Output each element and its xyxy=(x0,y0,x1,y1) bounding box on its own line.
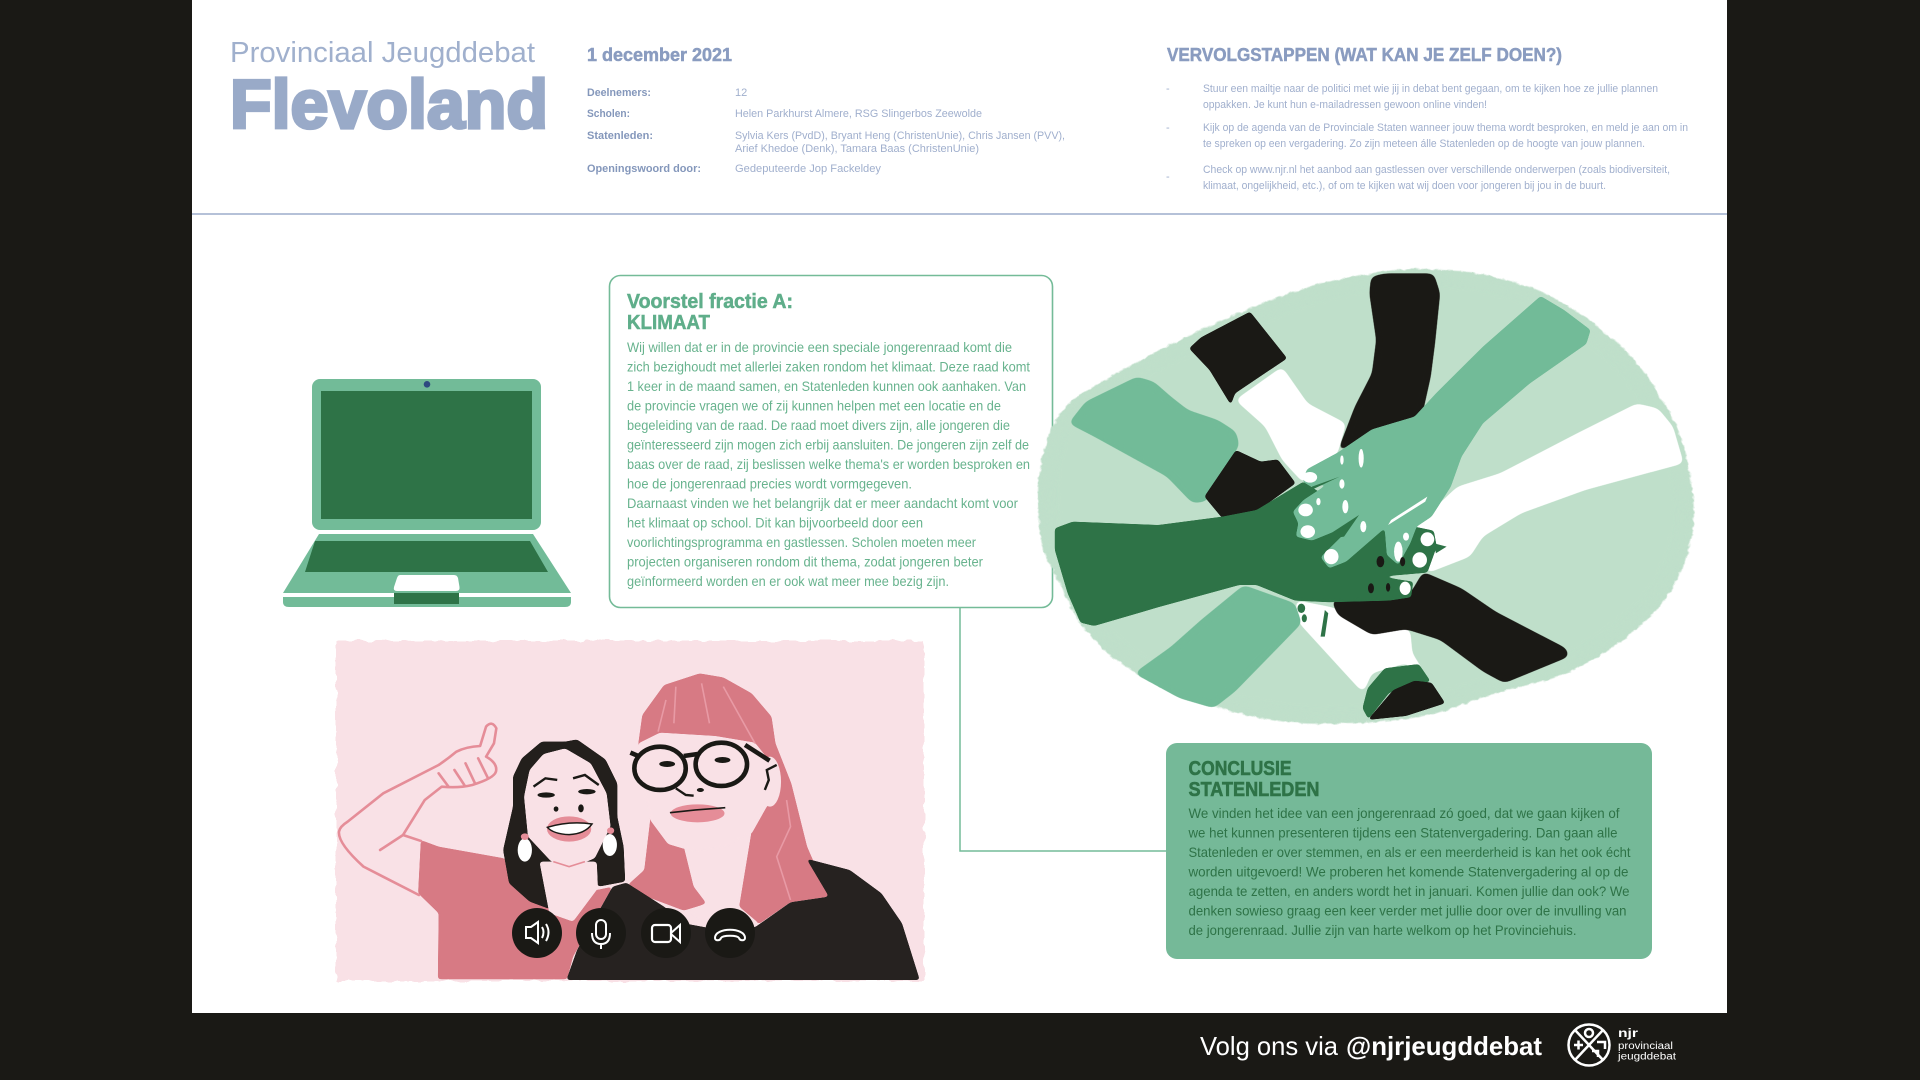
hand: mid green xyxy=(1293,296,1591,568)
date: 1 december 2021 xyxy=(587,45,732,65)
logo wordmark: jeugddebat xyxy=(1617,1052,1676,1062)
step 1: - xyxy=(1166,83,1170,95)
title block xyxy=(230,37,548,143)
step 2: te spreken op een vergadering. Zo zijn meteen álle Statenleden op de hoogte van jouw plannen. xyxy=(1203,138,1645,150)
logo: njr provinciaal jeugddebat xyxy=(1568,1024,1676,1066)
panel body text: worden uitgevoerd! We proberen het komende Statenvergadering al op de xyxy=(1188,864,1629,880)
laptop camera xyxy=(424,381,430,388)
schools: Scholen: xyxy=(587,108,630,120)
logo emblem xyxy=(1568,1024,1610,1066)
arm: black lower right xyxy=(1331,572,1569,683)
laptop touchpad xyxy=(394,575,460,591)
panel heading xyxy=(1188,758,1320,801)
person left: shirt xyxy=(418,840,613,979)
button: camera xyxy=(641,908,691,958)
people xyxy=(339,673,920,980)
panel body text: de jongerenraad. Jullie zijn van harte welkom op het Provinciehuis. xyxy=(1188,922,1576,938)
panel body text: Wij willen dat er in de provincie een speciale jongerenraad komt die xyxy=(627,339,1012,355)
person left: arm outline xyxy=(339,724,496,895)
cap: black xyxy=(1368,681,1445,720)
step 1 xyxy=(1166,83,1658,111)
person left: face xyxy=(524,748,611,867)
arm: black middle left xyxy=(1204,450,1296,518)
participants: 12 xyxy=(735,87,747,99)
finger folds xyxy=(1297,477,1447,637)
panel body text: geïnteresseerd zijn mogen zich erbij aansluiten. De jongeren zijn zelf de xyxy=(627,436,1029,452)
panel body text: agenda te zetten, en anders wordt het in januari. Komen jullie dan ook? We xyxy=(1188,883,1630,899)
panel body text xyxy=(1188,805,1631,938)
white sheet xyxy=(192,0,1727,1013)
panel heading: KLIMAAT xyxy=(627,312,710,334)
panel body text: het klimaat op school. Dit kan bijvoorbeeld door een xyxy=(627,514,923,530)
handle: @njrjeugddebat xyxy=(1346,1031,1542,1061)
step 3 xyxy=(1166,164,1670,192)
panel fill xyxy=(1166,743,1652,959)
connector line xyxy=(960,608,1166,851)
person right: shirt xyxy=(566,859,920,980)
background blob xyxy=(1038,268,1694,724)
person left: arm joint xyxy=(403,835,422,841)
panel heading: STATENLEDEN xyxy=(1188,779,1320,801)
opening speech: Openingswoord door: xyxy=(587,163,701,175)
laptop front lip xyxy=(283,597,571,607)
schools: Helen Parkhurst Almere, RSG Slingerbos Zeewolde xyxy=(735,108,982,120)
illustration: video call xyxy=(336,641,924,981)
person left: features xyxy=(534,775,599,867)
logo wordmark: provinciaal xyxy=(1618,1041,1673,1052)
follow text: Volg ons via xyxy=(1200,1031,1339,1061)
laptop display xyxy=(321,391,532,519)
panel body text: Statenleden er over stemmen, en als er een meerderheid is kan het ook écht xyxy=(1188,844,1631,860)
person right: features xyxy=(659,757,777,822)
laptop base xyxy=(283,534,571,593)
finger nails xyxy=(1298,449,1434,595)
step 2: - xyxy=(1166,122,1170,134)
step 1: Stuur een mailtje naar de politici met wie jij in debat bent gegaan, om te kijken hoe ze jullie plannen xyxy=(1203,83,1658,95)
panel body text: baas over de raad, zij beslissen welke thema's er worden besproken en xyxy=(627,456,1030,472)
panel body text: voorlichtingsprogramma en gastlessen. Scholen moeten meer xyxy=(627,534,976,550)
illustration: stacked hands xyxy=(1038,268,1694,724)
person right: glasses xyxy=(630,743,770,790)
panel body text: geïnformeerd worden en er ook wat meer mee bezig zijn. xyxy=(627,573,949,589)
call buttons xyxy=(512,908,755,958)
footer social handle xyxy=(1200,1031,1542,1061)
panel border xyxy=(610,276,1052,608)
opening speech: Gedeputeerde Jop Fackeldey xyxy=(735,163,881,175)
button: speaker xyxy=(512,908,562,958)
arm: mid green lower left xyxy=(1134,585,1302,708)
step 3: klimaat, ongelijkheid, etc.), of om te kijken wat wij doen voor jongeren bij jou in de buurt. xyxy=(1203,180,1606,192)
white gap: bottom xyxy=(1295,600,1432,693)
cuff: black upper left xyxy=(1189,312,1287,405)
panel body text: Daarnaast vinden we het belangrijk dat er meer aandacht komt voor xyxy=(627,495,1018,511)
person left: earrings xyxy=(518,827,617,862)
council members: Arief Khedoe (Denk), Tamara Baas (ChristenUnie) xyxy=(735,143,979,155)
knuckle marks xyxy=(1368,556,1405,593)
council members: Statenleden: xyxy=(587,130,653,142)
laptop keyboard xyxy=(305,541,548,572)
panel body text: zich bezighoudt met allerlei zaken rondom het klimaat. Deze raad komt xyxy=(627,358,1030,374)
laptop screen frame xyxy=(312,379,541,530)
participants xyxy=(587,87,747,99)
panel body text xyxy=(627,339,1030,589)
panel body text: hoe de jongerenraad precies wordt vormgegeven. xyxy=(627,476,912,492)
logo wordmark xyxy=(1617,1026,1676,1062)
event details xyxy=(587,45,1065,175)
white gap: upper left xyxy=(1235,367,1346,483)
panel: conclusion council members xyxy=(1166,743,1652,959)
panel body text: de provincie vragen we of zij kunnen helpen met een locatie en de xyxy=(627,398,1001,414)
step 2: Kijk op de agenda van de Provinciale Staten wanneer jouw thema wordt besproken, en meld je aan om in xyxy=(1203,122,1688,134)
person right: face xyxy=(638,733,781,852)
button: microphone xyxy=(576,908,626,958)
logo wordmark: njr xyxy=(1618,1026,1638,1040)
panel heading: CONCLUSIE xyxy=(1188,758,1292,780)
person right: hair xyxy=(628,673,829,924)
person left: fist fingers xyxy=(439,758,488,787)
person right: ear xyxy=(759,757,781,807)
panel body text: projecten organiseren rondom dit thema, zodat jongeren beter xyxy=(627,554,983,570)
panel body text: we het kunnen presenteren tijdens een Statenvergadering. Dan gaan alle xyxy=(1188,824,1618,840)
schools xyxy=(587,108,982,120)
person right: neck xyxy=(684,830,760,929)
call background xyxy=(336,641,924,981)
council members xyxy=(587,130,1065,155)
button: hang up xyxy=(705,908,755,958)
title: Provinciaal Jeugddebat: Provinciaal Jeugddebat xyxy=(230,37,535,69)
panel: proposal climate xyxy=(610,276,1052,608)
step 2 xyxy=(1166,122,1688,150)
person left: neck xyxy=(539,862,598,922)
laptop notch xyxy=(394,593,459,604)
step 3: - xyxy=(1166,171,1170,183)
icon: laptop xyxy=(283,379,571,607)
panel body text: begeleiding van de raad. De raad moet divers zijn, alle jongeren die xyxy=(627,417,1010,433)
next steps heading: VERVOLGSTAPPEN (WAT KAN JE ZELF DOEN?) xyxy=(1167,45,1562,65)
arm: mid green left xyxy=(1068,377,1239,503)
step 1: oppakken. Je kunt hun e-mailadressen gewoon online vinden! xyxy=(1203,99,1487,111)
title: Flevoland: Flevoland xyxy=(230,66,548,143)
panel heading: Voorstel fractie A: xyxy=(627,291,793,313)
person left: hair xyxy=(503,739,625,909)
participants: Deelnemers: xyxy=(587,87,651,99)
panel body text: denken sowieso graag een keer verder met jullie door over de invulling van xyxy=(1188,902,1626,918)
panel body text: 1 keer in de maand samen, en Statenleden kunnen ook aanhaken. Van xyxy=(627,378,1026,394)
panel body text: We vinden het idee van een jongerenraad zó goed, dat we gaan kijken of xyxy=(1188,805,1620,821)
hand: dark green xyxy=(1055,482,1437,626)
arm: black top xyxy=(1337,273,1440,453)
step 3: Check op www.njr.nl het aanbod aan gastlessen over verschillende onderwerpen (zoals biodiversiteit, xyxy=(1203,164,1670,176)
white gap: right xyxy=(1415,403,1684,573)
person right: hair highlights xyxy=(658,683,791,900)
council members: Sylvia Kers (PvdD), Bryant Heng (ChristenUnie), Chris Jansen (PVV), xyxy=(735,130,1065,142)
next steps xyxy=(1166,45,1688,192)
panel heading xyxy=(627,291,793,334)
opening speech xyxy=(587,163,881,175)
cap: dark green xyxy=(1362,664,1431,719)
